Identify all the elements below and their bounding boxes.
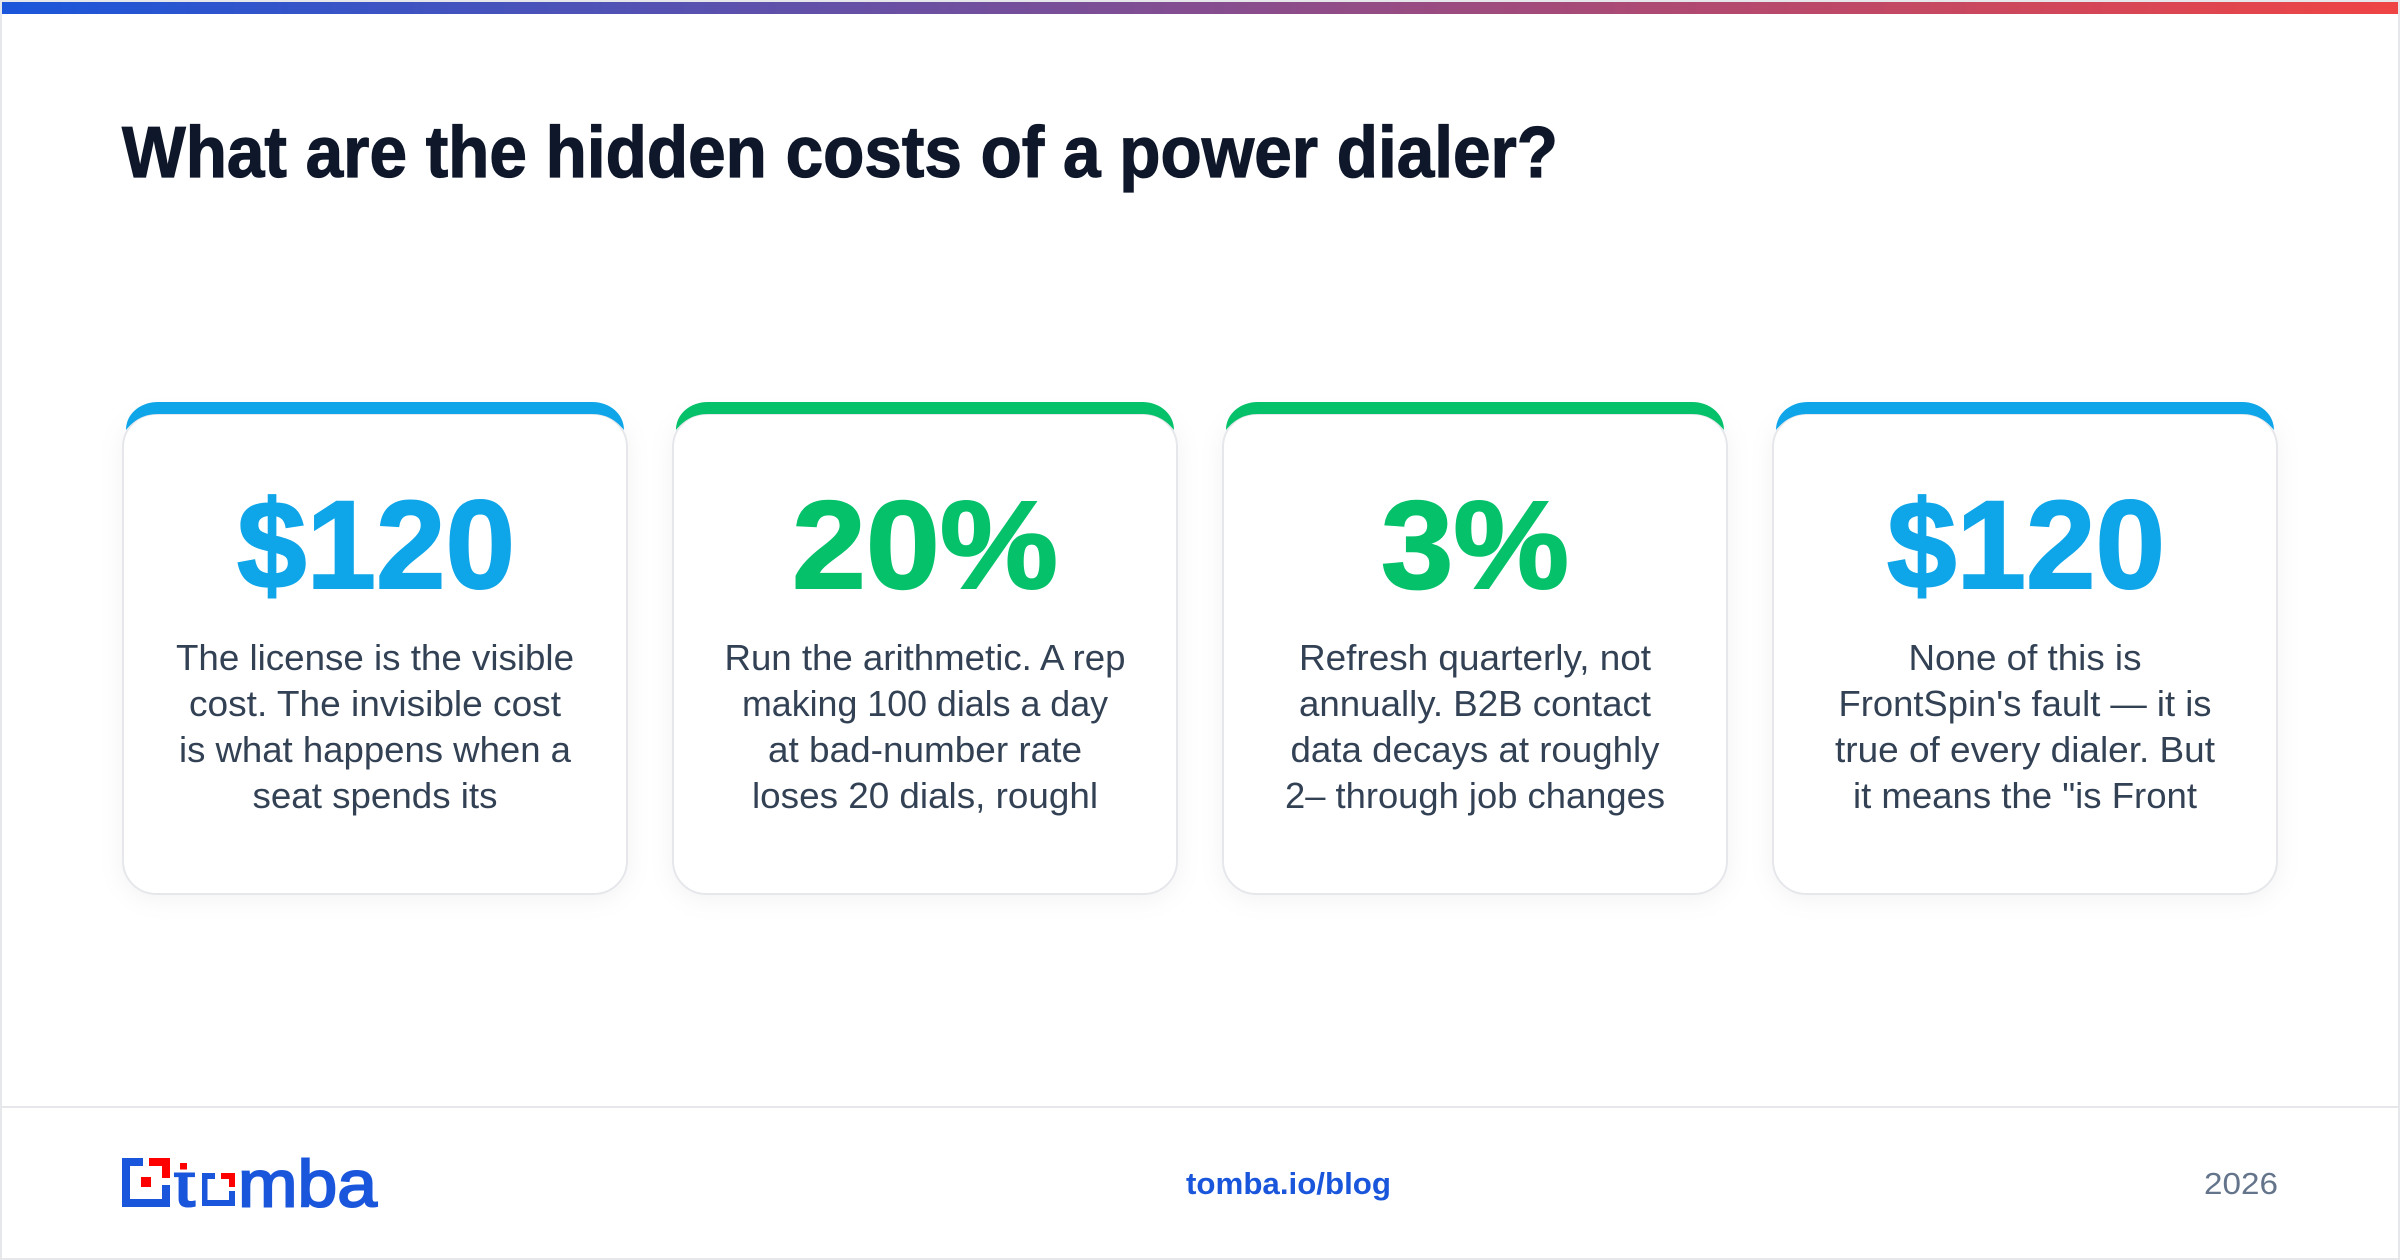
- description: 2– through job changes: [1285, 775, 1665, 816]
- description: annually. B2B contact: [1299, 683, 1651, 724]
- icon: logo mark: [122, 1158, 170, 1207]
- description: it means the "is Front: [1853, 775, 2197, 816]
- icon: logo square o: [202, 1173, 235, 1206]
- description: [1285, 637, 1665, 816]
- panel: card 2: [673, 402, 1177, 894]
- description: seat spends its: [252, 775, 498, 816]
- description: [176, 637, 574, 816]
- description: FrontSpin's fault — it is: [1838, 683, 2212, 724]
- panel: card 1: [123, 402, 627, 894]
- logo letter t: [174, 1163, 196, 1208]
- description: cost. The invisible cost: [189, 683, 561, 724]
- stat: 3%: 3%: [1381, 476, 1569, 615]
- stat: $120: $120: [1887, 476, 2165, 615]
- description: is what happens when a: [179, 729, 572, 770]
- description: The license is the visible: [176, 637, 574, 678]
- description: data decays at roughly: [1290, 729, 1660, 770]
- description: making 100 dials a day: [742, 683, 1108, 724]
- logo letter t: t: [174, 1148, 195, 1220]
- logo: tomba: [122, 1158, 378, 1208]
- footer year: 2026: [2204, 1166, 2278, 1201]
- description: None of this is: [1908, 637, 2142, 678]
- description: [724, 637, 1126, 816]
- logo letters mba: mba: [238, 1146, 377, 1220]
- footer divider: [2, 1106, 2398, 1108]
- description: at bad-number rate: [768, 729, 1082, 770]
- description: true of every dialer. But: [1835, 729, 2215, 770]
- title: What are the hidden costs of a power dialer?: [122, 113, 1558, 193]
- panel: card 4: [1773, 402, 2277, 894]
- stat: $120: $120: [237, 476, 515, 615]
- description: [1835, 637, 2215, 816]
- description: Run the arithmetic. A rep: [724, 637, 1126, 678]
- stat: 20%: 20%: [792, 476, 1058, 615]
- description: loses 20 dials, roughl: [752, 775, 1098, 816]
- footer link: tomba.io/blog: [1186, 1166, 1391, 1201]
- panel: card 3: [1223, 402, 1727, 894]
- top gradient bar: [2, 2, 2398, 14]
- description: Refresh quarterly, not: [1299, 637, 1651, 678]
